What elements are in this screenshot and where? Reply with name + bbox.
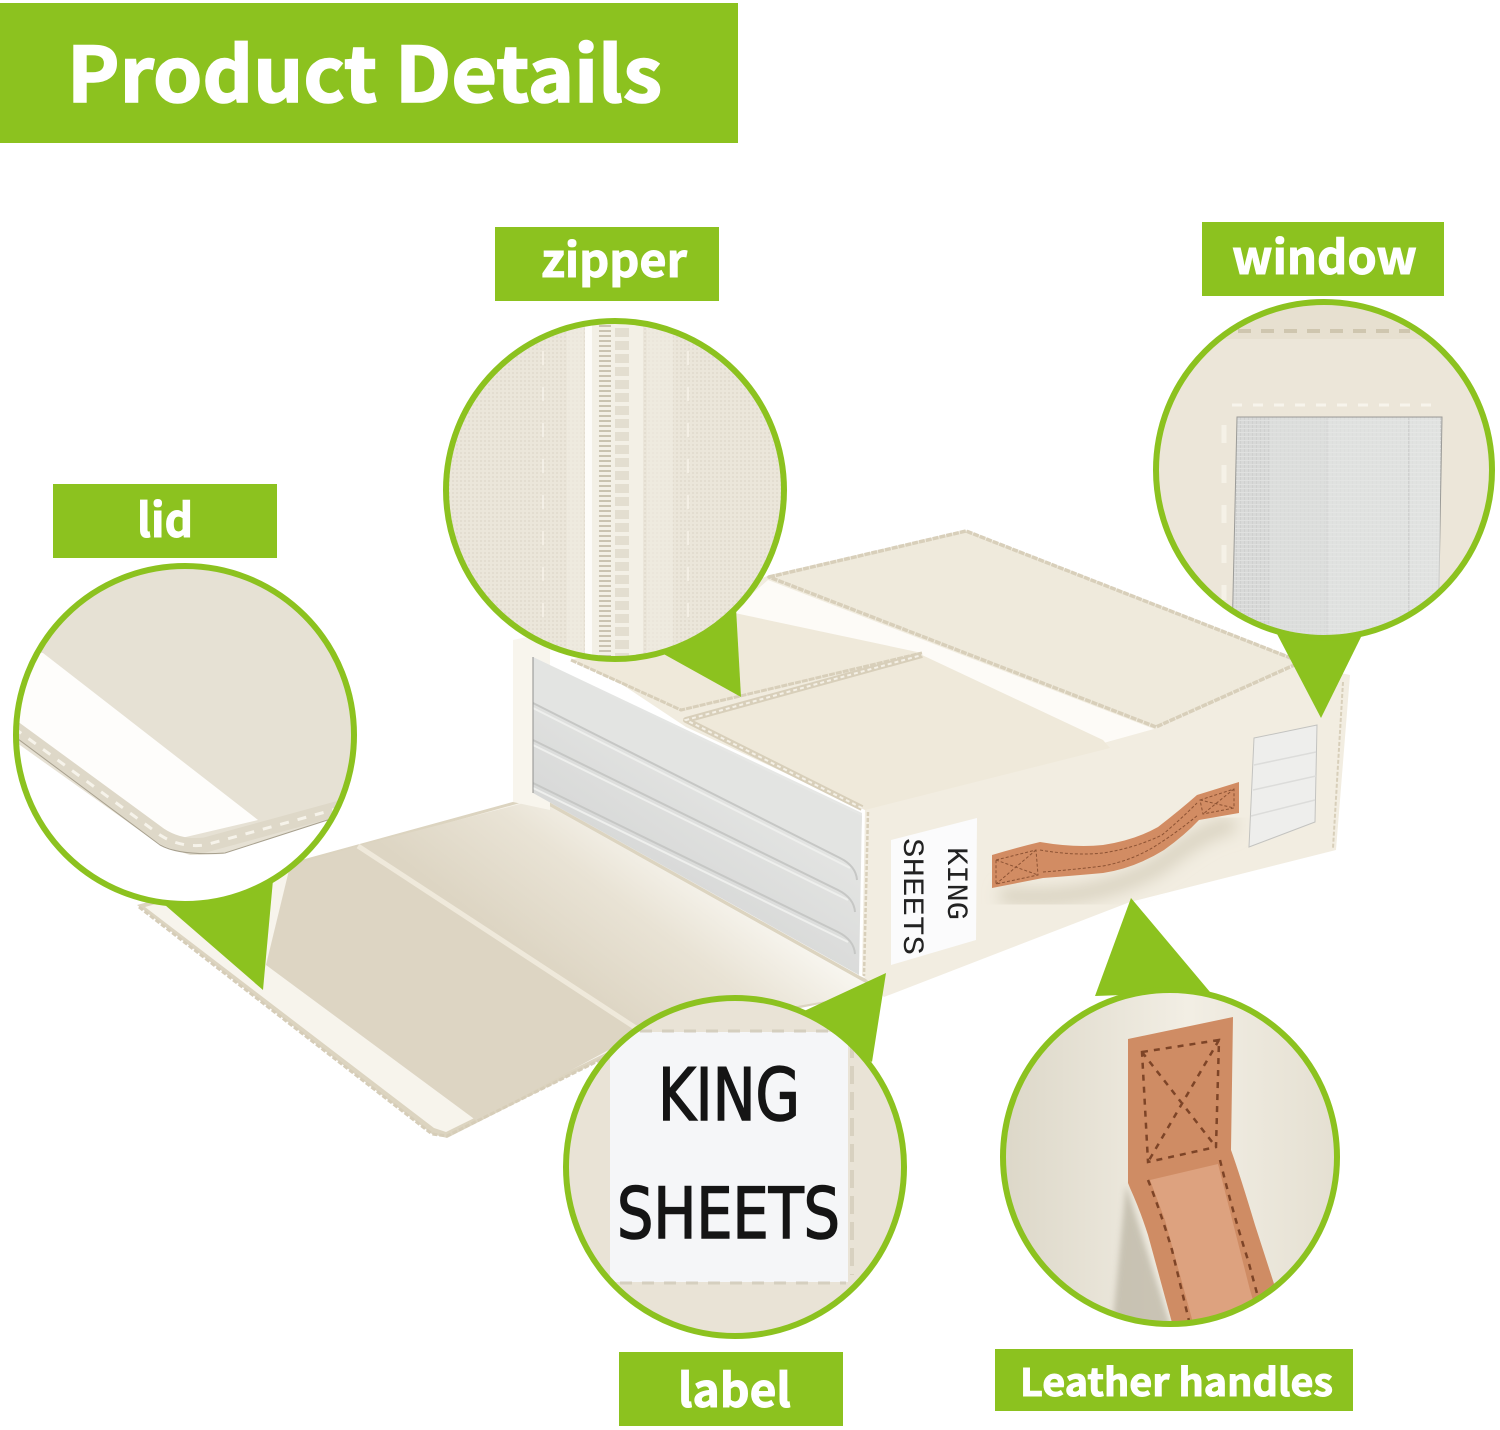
arrow: label: [802, 973, 886, 1062]
front left stitching: [864, 812, 868, 976]
label: window: window: [1232, 222, 1417, 288]
title: [0, 3, 738, 143]
stack of bedding: [533, 657, 862, 975]
label: label: [619, 1352, 843, 1426]
arrow: lid: [165, 880, 273, 990]
label: window: [1202, 222, 1444, 296]
label: lid: [53, 484, 277, 558]
title: Product Details: [67, 14, 662, 124]
side label card: KING: [938, 847, 972, 920]
arrow: leather handles: [1095, 898, 1210, 996]
arrow: window: [1276, 632, 1362, 718]
leather handle with shadow: [992, 782, 1239, 897]
label: label: label: [678, 1355, 791, 1421]
label: leather handles: Leather handles: [1020, 1352, 1333, 1407]
right edge stitching: [1333, 682, 1343, 848]
label: lid: lid: [137, 485, 193, 551]
open lid flap: [137, 793, 890, 1138]
storage box illustration: [137, 530, 1350, 1138]
circle: leather handle detail: [1000, 988, 1342, 1330]
side label card: SHEETS: [894, 838, 928, 955]
white strap across top: [730, 580, 1154, 744]
circle: label detail: [563, 996, 908, 1341]
side window: [1249, 725, 1317, 847]
back left flap: [571, 612, 922, 712]
arrow: zipper: [660, 608, 741, 697]
circle: zipper detail: [440, 315, 790, 665]
circle: label detail: KING: [658, 1053, 800, 1137]
front top flap: [571, 653, 1110, 810]
box front face: [862, 664, 1350, 997]
circle: window detail: [1150, 300, 1500, 645]
box top base: [570, 530, 1300, 810]
label: zipper: zipper: [541, 225, 688, 291]
box top back flap: [769, 531, 1301, 727]
box back panel: [513, 632, 550, 810]
label: zipper: [495, 225, 719, 301]
side label card: [891, 818, 977, 965]
circle: label detail: SHEETS: [617, 1173, 840, 1255]
circle: lid detail: [10, 563, 358, 910]
